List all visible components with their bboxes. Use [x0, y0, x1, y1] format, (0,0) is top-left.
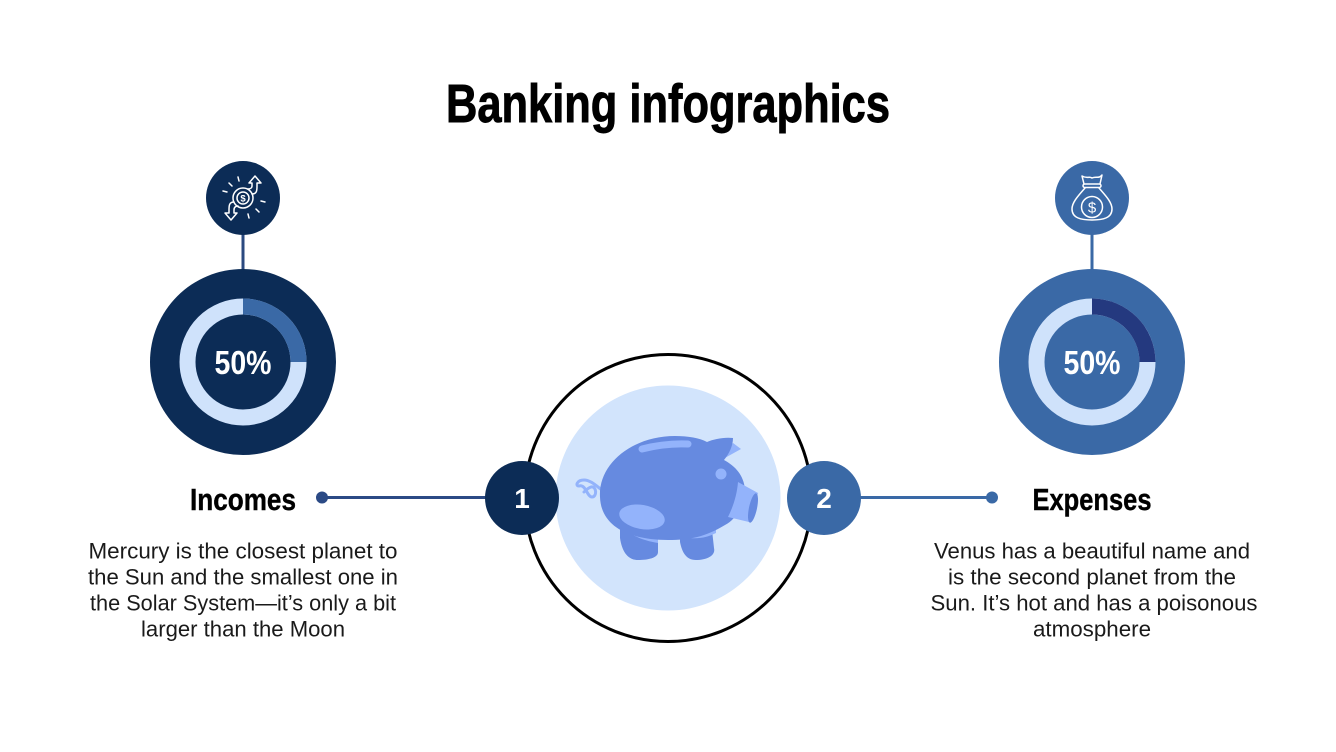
text block: expenses — [930, 538, 1258, 642]
connector: incomes — [316, 492, 487, 504]
icon: money exchange: $ — [240, 194, 246, 204]
donut chart: expenses — [999, 269, 1185, 455]
number badge 1: 1 — [514, 483, 530, 514]
text block: incomes: the Solar System—it’s only a bit — [90, 590, 396, 616]
percentage: incomes: 50% — [214, 344, 272, 381]
number badge 1 — [485, 461, 559, 535]
connector: expenses — [858, 492, 998, 504]
icon: money bag: $ — [1088, 200, 1097, 216]
icon: money exchange — [206, 161, 280, 235]
number badge 2 — [787, 461, 861, 535]
heading: incomes: Incomes — [190, 482, 296, 517]
text block: incomes — [88, 538, 398, 642]
text block: incomes: larger than the Moon — [141, 616, 345, 642]
title: Banking infographics — [446, 74, 890, 134]
percentage: expenses: 50% — [1064, 344, 1120, 381]
text block: incomes: Mercury is the closest planet to — [88, 538, 398, 564]
icon: money bag — [1055, 161, 1129, 235]
icon: piggy bank — [577, 436, 760, 560]
outer ring — [524, 354, 812, 642]
inner pale circle — [556, 386, 780, 610]
text block: expenses: Venus has a beautiful name and — [934, 538, 1250, 564]
text block: expenses: is the second planet from the — [948, 564, 1236, 590]
text block: expenses: atmosphere — [1033, 616, 1151, 642]
donut chart: incomes — [150, 269, 336, 455]
connector: expense icon to donut — [1090, 230, 1094, 272]
text block: expenses: Sun. It’s hot and has a poisonous — [930, 590, 1258, 616]
text block: incomes: the Sun and the smallest one in — [88, 564, 398, 590]
number badge 2: 2 — [816, 483, 832, 514]
connector: income icon to donut — [242, 230, 244, 272]
heading: expenses: Expenses — [1032, 482, 1152, 517]
